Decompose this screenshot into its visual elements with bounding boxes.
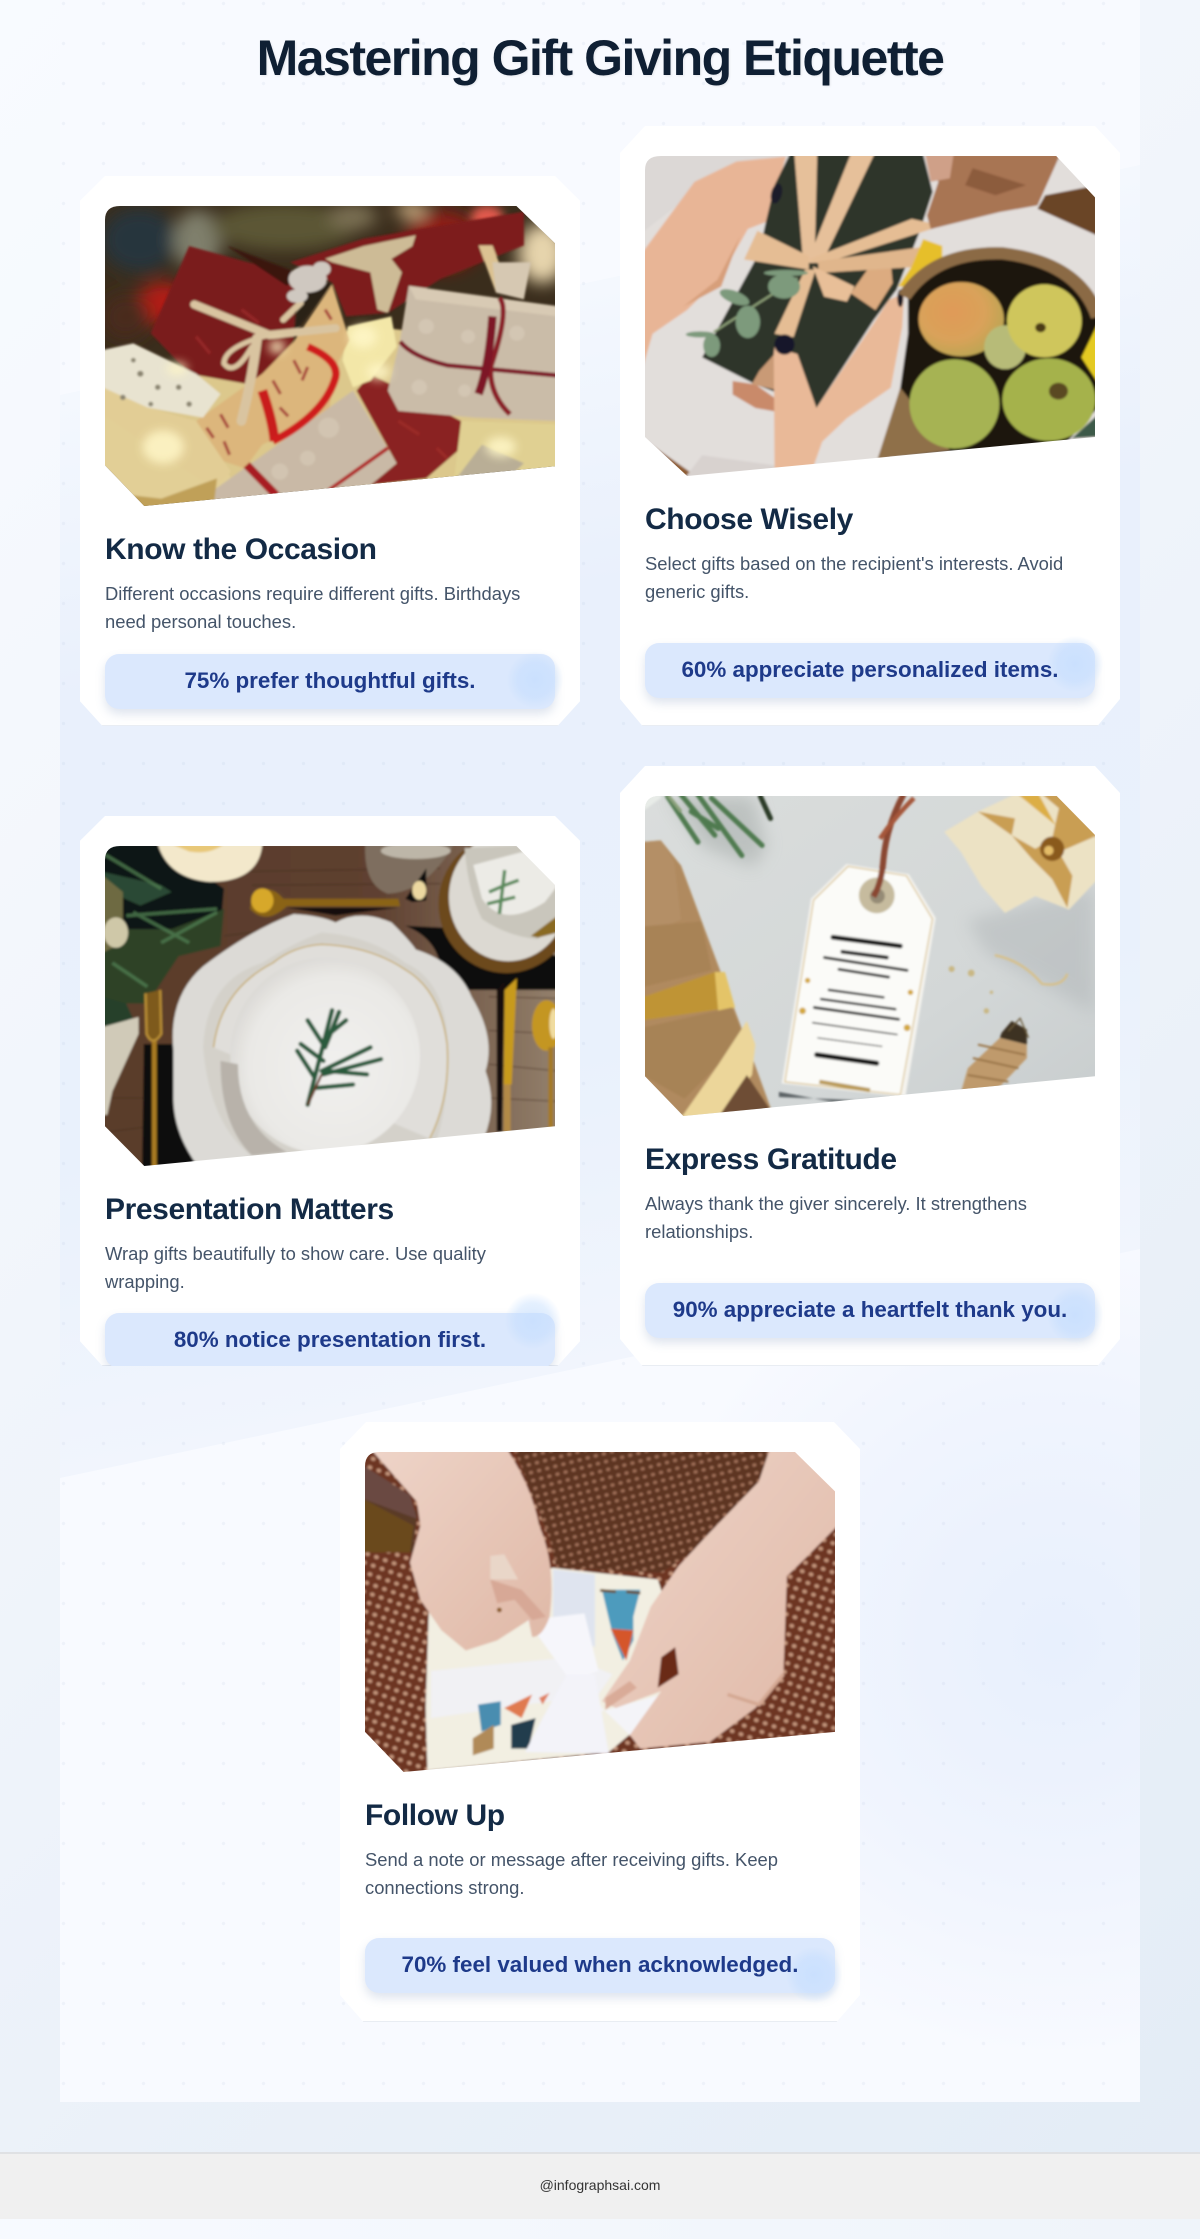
stat callout: 80% notice presentation first. [174,1326,486,1352]
heading: Follow Up [365,1799,505,1832]
photo: table setting with white plates and gold cutlery [105,846,555,1166]
body text: Send a note or message after receiving gifts. Keep connections strong. [365,1849,778,1898]
stat callout: 70% feel valued when acknowledged. [402,1952,798,1976]
body text: Wrap gifts beautifully to show care. Use quality wrapping. [105,1243,486,1292]
panel: Follow Up [340,1422,860,2022]
stat callout: 90% appreciate a heartfelt thank you. [673,1296,1067,1322]
stat callout: 75% prefer thoughtful gifts. [184,668,476,692]
body text: Select gifts based on the recipient's interests. Avoid generic gifts. [645,553,1063,602]
panel: Choose Wisely [620,126,1120,726]
body text: Always thank the giver sincerely. It strengthens relationships. [645,1193,1027,1242]
stat callout [105,654,555,709]
photo: hands exchanging a green gift beside a fruit basket [645,156,1095,476]
stat callout [105,1313,555,1368]
title: Mastering Gift Giving Etiquette [257,30,943,86]
bottom strip [0,2219,1200,2239]
stat callout: 60% appreciate personalized items. [681,656,1059,682]
stat callout [645,643,1095,698]
photo: hands tying a white bow on a gift [365,1452,835,1772]
stat callout [365,1938,835,1993]
panel: Express Gratitude [620,766,1120,1366]
body text: Different occasions require different gifts. Birthdays need personal touches. [105,583,520,632]
footer: @infographsai.com [540,2177,660,2193]
photo: pile of wrapped gifts [105,206,555,506]
panel: Know the Occasion [80,176,580,726]
heading: Choose Wisely [645,503,853,536]
heading: Know the Occasion [105,533,377,566]
panel: Presentation Matters [80,816,580,1366]
footer [0,2152,1200,2219]
photo: handwritten gift tag with kraft wrapping [645,796,1095,1116]
heading: Presentation Matters [105,1193,394,1226]
stat callout [645,1283,1095,1338]
diagonal blue band [60,278,1140,1438]
heading: Express Gratitude [645,1143,897,1176]
